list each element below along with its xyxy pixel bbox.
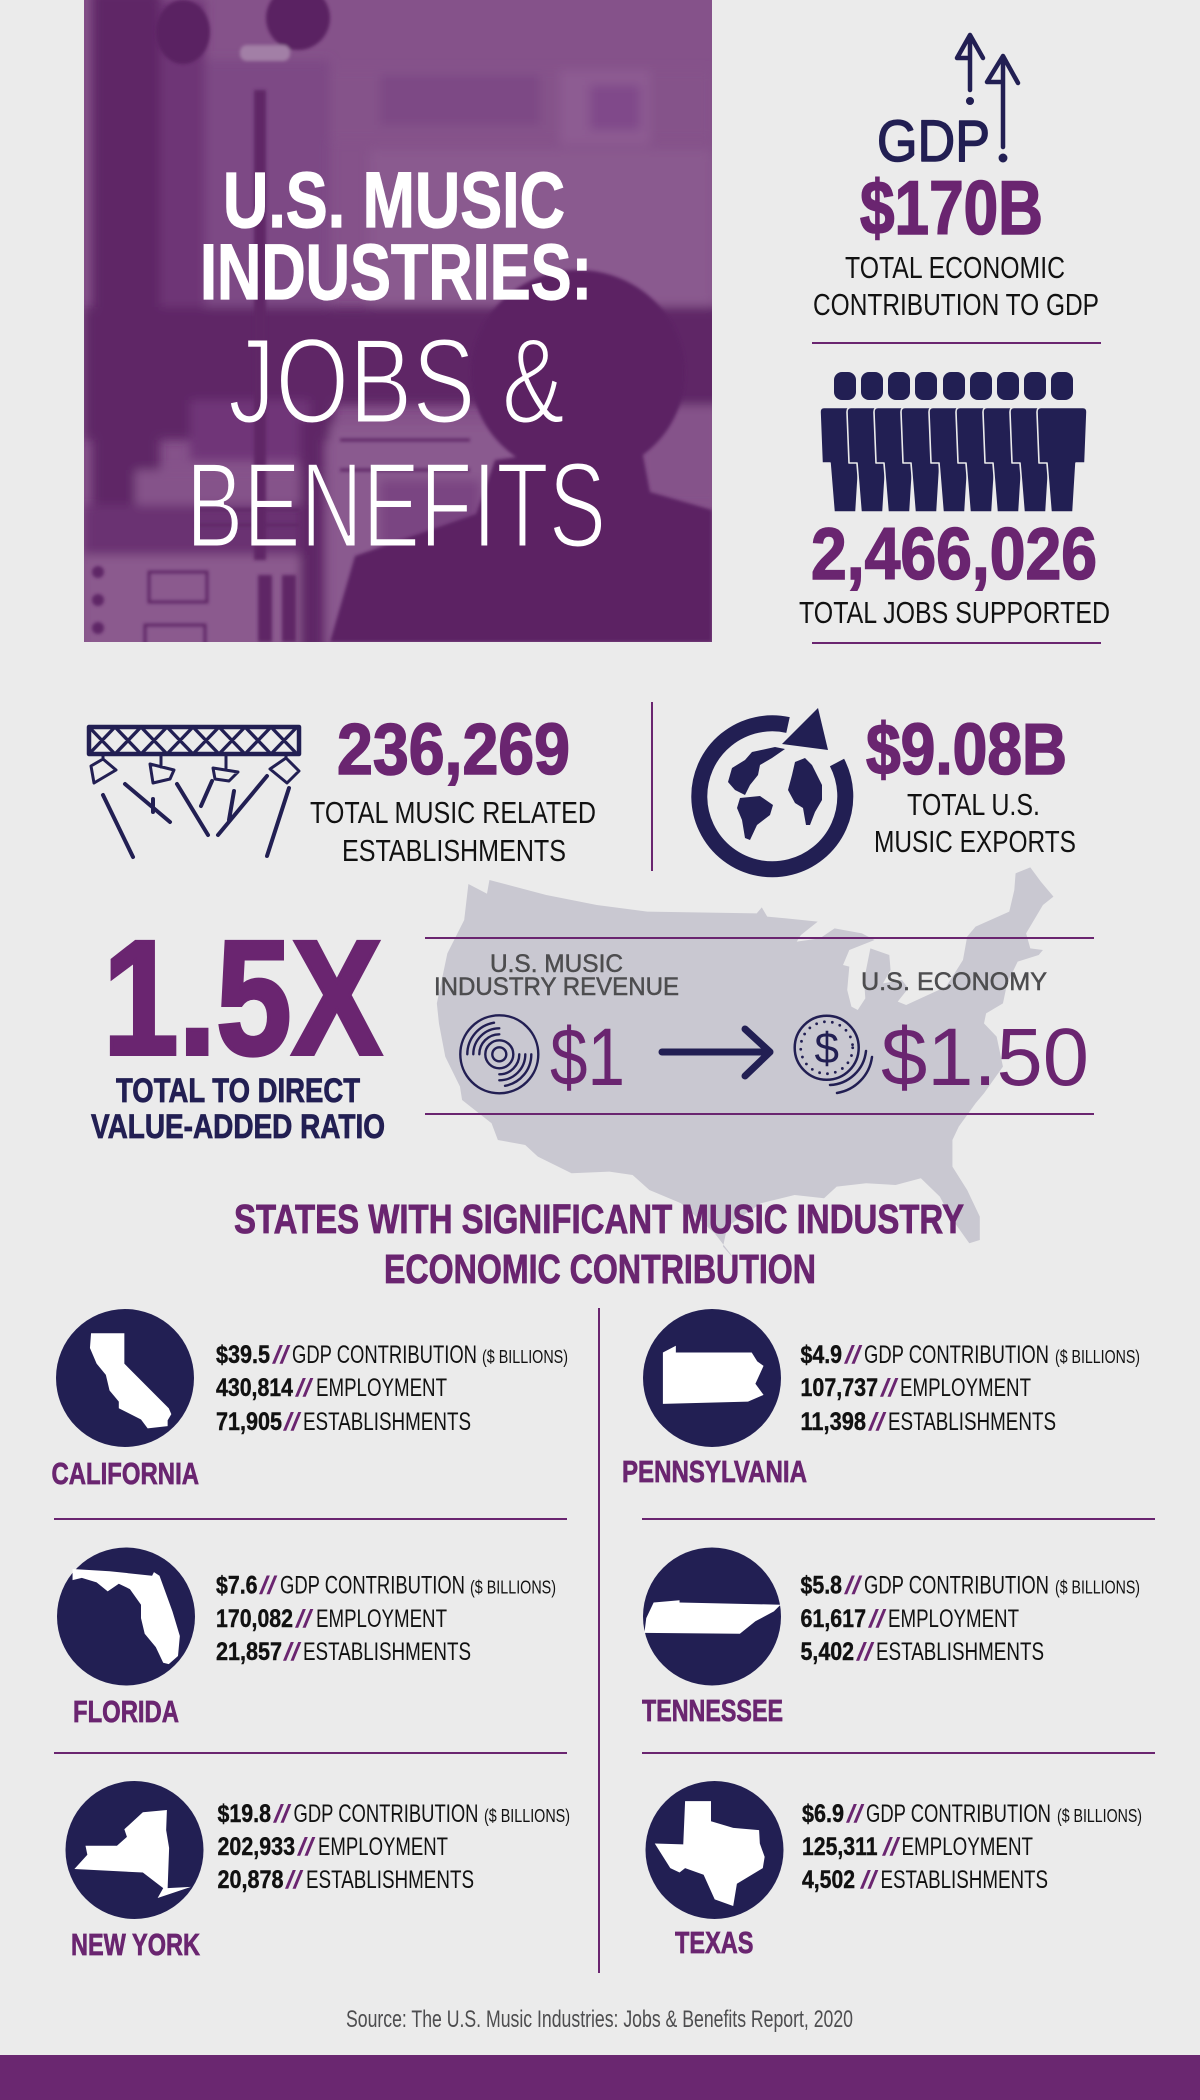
stats: //	[880, 1374, 899, 1402]
stats: //	[860, 1866, 879, 1894]
stats	[802, 1800, 1142, 1894]
stats	[800, 1341, 1140, 1436]
us map silhouette	[437, 867, 1053, 1263]
state name: TENNESSEE	[642, 1693, 783, 1728]
icon: vinyl record	[460, 1015, 538, 1093]
stats: GDP CONTRIBUTION	[864, 1572, 1049, 1600]
icon: stage lights truss	[89, 727, 299, 857]
stats: $39.5	[216, 1341, 270, 1369]
exports label	[874, 787, 1076, 859]
panel: pennsylvania	[622, 1309, 1140, 1489]
stats: GDP CONTRIBUTION	[294, 1800, 478, 1828]
stats: ($ BILLIONS)	[1055, 1347, 1140, 1367]
stats	[800, 1572, 1140, 1666]
stats: 202,933	[218, 1833, 295, 1861]
stats: 5,402	[800, 1638, 854, 1666]
stats: //	[285, 1866, 304, 1894]
state name: PENNSYLVANIA	[622, 1454, 807, 1489]
revenue heading	[434, 950, 679, 1001]
stats: ESTABLISHMENTS	[876, 1638, 1044, 1666]
stats: GDP CONTRIBUTION	[280, 1572, 465, 1600]
ratio label: VALUE-ADDED RATIO	[91, 1108, 385, 1146]
stats: 21,857	[216, 1638, 282, 1666]
stats: //	[273, 1800, 292, 1828]
stats: EMPLOYMENT	[316, 1374, 447, 1402]
panel: new york	[66, 1781, 570, 1962]
stats	[216, 1341, 568, 1436]
ratio value: 1.5X	[103, 906, 382, 1089]
stats	[216, 1572, 556, 1666]
revenue heading: INDUSTRY REVENUE	[434, 973, 679, 1001]
icon: california	[56, 1309, 194, 1447]
icon: coin stack: $	[814, 1024, 839, 1073]
stats: GDP CONTRIBUTION	[866, 1800, 1051, 1828]
gdp label	[813, 250, 1099, 322]
stats: //	[844, 1341, 863, 1369]
stats: //	[259, 1572, 278, 1600]
stats: //	[295, 1374, 314, 1402]
arrow	[662, 1029, 770, 1076]
stats: //	[882, 1833, 901, 1861]
panel: revenue multiplier	[425, 937, 1094, 1115]
stats: 170,082	[216, 1605, 293, 1633]
title: BENEFITS	[186, 437, 606, 573]
title: JOBS &	[228, 313, 565, 449]
establishments label: ESTABLISHMENTS	[342, 833, 566, 868]
icon: gdp arrows: GDP	[877, 109, 990, 174]
stats: ESTABLISHMENTS	[303, 1408, 471, 1436]
footer bar	[0, 2055, 1200, 2100]
stats: //	[846, 1800, 865, 1828]
hero photo	[84, 0, 724, 655]
panel: establishments	[89, 710, 596, 868]
state name: FLORIDA	[73, 1694, 179, 1729]
stats: ESTABLISHMENTS	[306, 1866, 474, 1894]
gdp value: $170B	[860, 166, 1043, 251]
stats: $5.8	[800, 1572, 842, 1600]
stats: //	[856, 1638, 875, 1666]
stats: ($ BILLIONS)	[1055, 1578, 1140, 1598]
stats: 430,814	[216, 1374, 293, 1402]
title	[186, 155, 606, 573]
gdp label: CONTRIBUTION TO GDP	[813, 287, 1099, 322]
stats: 20,878	[218, 1866, 284, 1894]
icon: tennessee	[643, 1548, 781, 1686]
stats: GDP CONTRIBUTION	[864, 1341, 1049, 1369]
panel: value-added ratio	[91, 906, 385, 1146]
panel: california	[52, 1309, 568, 1491]
jobs value: 2,466,026	[811, 514, 1097, 595]
stats: EMPLOYMENT	[316, 1605, 447, 1633]
title: U.S. MUSIC	[223, 155, 565, 244]
exports value: $9.08B	[866, 710, 1067, 790]
panel: florida	[57, 1548, 556, 1729]
icon: texas	[646, 1781, 784, 1919]
exports label: TOTAL U.S.	[907, 787, 1040, 822]
stats: ($ BILLIONS)	[470, 1578, 556, 1598]
stats	[218, 1800, 570, 1894]
stats: $4.9	[800, 1341, 842, 1369]
panel: jobs	[799, 372, 1110, 630]
revenue heading: U.S. MUSIC	[490, 950, 623, 978]
one fifty dollars: $1.50	[881, 1012, 1089, 1103]
panel: tennessee	[642, 1548, 1140, 1728]
stats: 71,905	[216, 1408, 282, 1436]
stats: //	[297, 1833, 316, 1861]
source note: Source: The U.S. Music Industries: Jobs & Benefits Report, 2020	[346, 2006, 853, 2033]
icon: gdp arrows	[877, 35, 1018, 174]
hero panel	[84, 0, 724, 655]
stats: $7.6	[216, 1572, 258, 1600]
heading: states	[234, 1196, 964, 1292]
stats: 107,737	[800, 1374, 878, 1402]
stats: EMPLOYMENT	[888, 1605, 1019, 1633]
stats: 125,311	[802, 1833, 878, 1861]
icon: florida	[57, 1548, 195, 1686]
stats: ESTABLISHMENTS	[888, 1408, 1056, 1436]
gdp label: TOTAL ECONOMIC	[845, 250, 1065, 285]
stats: //	[272, 1341, 291, 1369]
exports label: MUSIC EXPORTS	[874, 824, 1076, 859]
stats: EMPLOYMENT	[318, 1833, 448, 1861]
panel: gdp	[813, 35, 1099, 322]
ratio label	[91, 1072, 385, 1146]
ratio label: TOTAL TO DIRECT	[116, 1072, 360, 1110]
stats: $6.9	[802, 1800, 844, 1828]
state name: TEXAS	[675, 1925, 754, 1960]
panel: texas	[646, 1781, 1142, 1960]
icon: new york	[66, 1781, 204, 1919]
establishments label	[310, 795, 596, 868]
stats: $19.8	[218, 1800, 271, 1828]
stats: ESTABLISHMENTS	[880, 1866, 1048, 1894]
stats: //	[283, 1638, 302, 1666]
stats: //	[868, 1408, 887, 1436]
stats: //	[283, 1408, 302, 1436]
stats: EMPLOYMENT	[902, 1833, 1033, 1861]
icon: workers row	[820, 372, 1087, 512]
icon: coin stack	[795, 1016, 872, 1093]
stats: EMPLOYMENT	[900, 1374, 1031, 1402]
stats: //	[295, 1605, 314, 1633]
establishments value: 236,269	[337, 710, 570, 790]
economy heading: U.S. ECONOMY	[861, 968, 1047, 996]
title: INDUSTRIES:	[200, 227, 592, 316]
one dollar: $1	[550, 1012, 625, 1103]
stats: ($ BILLIONS)	[1057, 1806, 1142, 1826]
stats: //	[844, 1572, 863, 1600]
heading: states: STATES WITH SIGNIFICANT MUSIC INDUSTRY	[234, 1196, 964, 1242]
establishments label: TOTAL MUSIC RELATED	[310, 795, 596, 830]
heading: states: ECONOMIC CONTRIBUTION	[384, 1246, 816, 1292]
stats: ESTABLISHMENTS	[303, 1638, 471, 1666]
panel: exports	[699, 708, 1076, 869]
state name: CALIFORNIA	[52, 1456, 199, 1491]
stats: //	[868, 1605, 887, 1633]
jobs label: TOTAL JOBS SUPPORTED	[799, 595, 1110, 630]
icon: pennsylvania	[643, 1309, 781, 1447]
stats: 4,502	[802, 1866, 855, 1894]
stats: GDP CONTRIBUTION	[292, 1341, 477, 1369]
stats: 61,617	[800, 1605, 866, 1633]
icon: rotating globe	[699, 708, 845, 869]
stats: 11,398	[800, 1408, 866, 1436]
stats: ($ BILLIONS)	[482, 1347, 568, 1367]
stats: ($ BILLIONS)	[484, 1806, 570, 1826]
state name: NEW YORK	[71, 1927, 200, 1962]
